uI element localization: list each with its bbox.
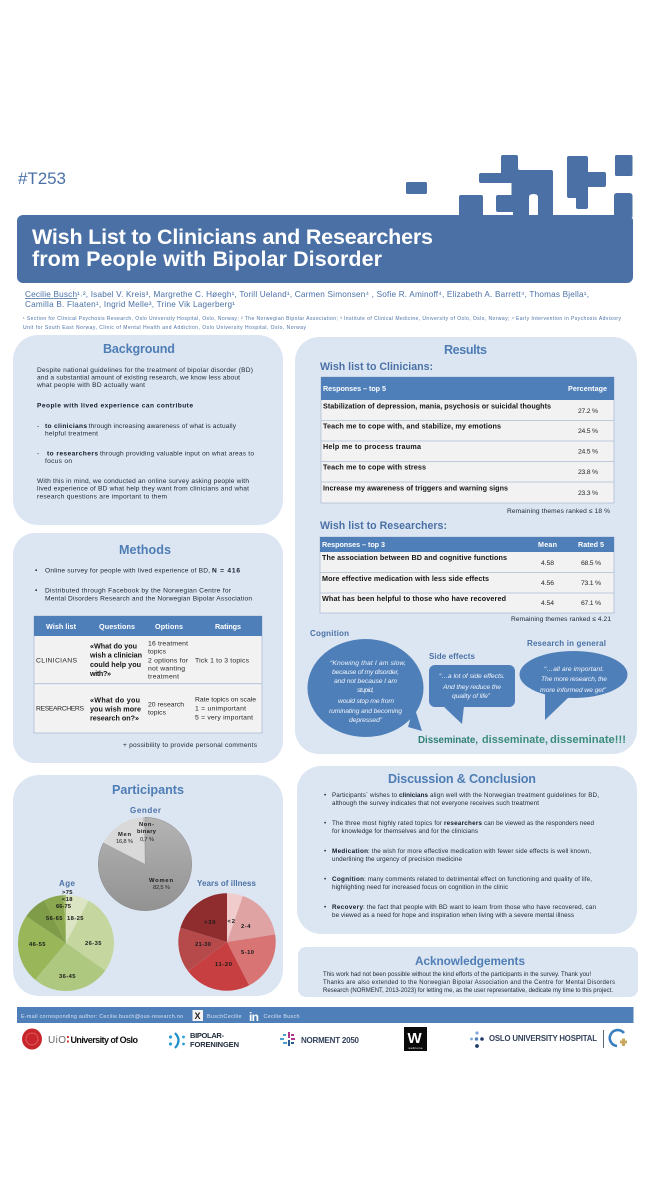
heading: acknowledgements: Acknowledgements <box>415 954 525 968</box>
logo: Wellcome <box>404 1027 427 1051</box>
affiliations: ¹ Section for Clinical Psychosis Research, Oslo University Hospital, Oslo, Norway; ² The Norwegian Bipolar Association; ³ Institute of Clinical Medicine, University of Oslo, Oslo, Norway; ⁴ Early Intervention in Psychosis Advisory <box>23 316 622 322</box>
text block: background: Despite national guidelines for the treatment of bipolar disorder (BD) <box>37 367 253 374</box>
text block: background: People with lived experience can contribute <box>37 403 193 410</box>
text block: discussion bullets: Medication <box>332 848 368 855</box>
pie chart: gender: Men <box>118 832 131 838</box>
speech bubble: cognition: would stop me from <box>338 698 394 705</box>
text block: discussion bullets: although the survey indicates that not everyone receives such treatment <box>332 800 539 807</box>
text block: discussion bullets: • <box>324 876 326 883</box>
pie chart: gender: 16,8 % <box>116 839 133 845</box>
table: survey design: «What do you <box>90 695 140 704</box>
icon: X <box>192 1010 203 1021</box>
pie chart: years of illness: 11-20 <box>215 962 232 968</box>
text block: discussion bullets: underlining the urgency of precision medicine <box>332 856 462 863</box>
panel: methods <box>13 533 283 763</box>
table: wish list to researchers: Responses – top 3 <box>322 540 385 549</box>
logo: Bipolarforeningen <box>169 1031 239 1049</box>
table: survey design: CLINICIANS <box>36 658 77 665</box>
table: survey design: could help you <box>90 660 141 669</box>
logo: Wellcome: W <box>408 1030 422 1047</box>
text block: discussion bullets: : the wish for more effective medication with fewer side effects is well known, <box>368 848 591 855</box>
pie chart: gender <box>98 817 192 911</box>
title: Wish List to Clinicians and Researchers <box>32 225 433 249</box>
text block: background <box>36 367 254 500</box>
pie chart: age: 46-55 <box>29 942 46 948</box>
title banner <box>17 215 633 283</box>
speech bubble: cognition: stupid, <box>357 687 374 694</box>
table: survey design: Ratings <box>215 622 241 631</box>
pie chart: age: 56-65 <box>46 916 63 922</box>
text block: methods bullets: Mental Disorders Research and the Norwegian Bipolar Association <box>45 596 252 603</box>
text block: discussion bullets <box>324 792 599 919</box>
text block: discussion bullets: The three most highly rated topics for <box>332 820 442 827</box>
table: survey design: Wish list <box>46 622 77 631</box>
speech bubble: cognition: and not because I am <box>334 678 397 685</box>
table: wish list to clinicians: Percentage <box>568 384 607 393</box>
table: wish list to clinicians: Responses – top 5 <box>323 384 386 393</box>
logo: Oslo University Hospital <box>470 1030 627 1048</box>
logo: Wellcome: wellcome <box>408 1046 423 1050</box>
text block: acknowledgements <box>323 972 615 994</box>
table: survey design: 5 = very important <box>195 715 253 722</box>
table: survey design: 1 = unimportant <box>195 706 246 713</box>
icon: X: X <box>194 1011 201 1021</box>
speech bubble: research in general: “…all are important. <box>544 666 604 673</box>
table: survey design: «What do you <box>90 642 137 651</box>
pie chart: years of illness: 5-10 <box>241 950 254 956</box>
text block: discussion bullets: can be viewed as the responders need <box>484 820 594 827</box>
table: survey design: wish a clinician <box>89 651 142 660</box>
logo: University of Oslo: UiO <box>48 1035 66 1046</box>
table: wish list to researchers <box>320 537 614 613</box>
heading: background: Background <box>103 342 175 356</box>
text block: background: to clinicians <box>45 423 87 430</box>
table: wish list to clinicians: Increase my awareness of triggers and warning signs <box>323 484 508 493</box>
table: wish list to clinicians: 23.8 % <box>578 469 598 476</box>
pie chart: gender: binary <box>137 829 157 835</box>
text block: background: focus on <box>45 458 72 465</box>
text block: background: - <box>37 423 39 430</box>
speech bubble: research in general: The more research, the <box>541 676 607 683</box>
subheading: clinicians: Wish list to Clinicians: <box>320 361 433 373</box>
text block: methods bullets <box>35 567 252 603</box>
text block: background: through increasing awareness of what is actually <box>88 423 237 430</box>
table: survey design: Rate topics on scale <box>195 696 256 703</box>
table: survey design: Options <box>155 622 183 631</box>
panel: discussion and conclusion <box>297 766 637 934</box>
pie chart: age <box>18 890 114 991</box>
affiliations <box>23 316 622 331</box>
table: wish list to researchers: What has been helpful to those who have recovered <box>322 594 506 603</box>
logo: University of Oslo <box>22 1028 138 1050</box>
table: survey design: topics <box>148 649 167 656</box>
text block: background: With this in mind, we conducted an online survey asking people with <box>37 478 249 485</box>
pie chart: age: 66-75 <box>56 904 72 910</box>
pie chart: gender: Non- <box>139 822 154 828</box>
callout: disseminate: disseminate!!! <box>550 734 626 746</box>
table: survey design: 2 options for <box>148 658 189 665</box>
text block: methods bullets: • <box>35 567 38 574</box>
note: remaining clinician themes: Remaining themes ranked ≤ 18 % <box>507 508 610 515</box>
text block: discussion bullets: highlighting need for increased focus on cognition in the clinic <box>332 884 508 891</box>
note: personal comments: + possibility to provide personal comments <box>123 742 258 749</box>
contact bar <box>17 1007 634 1024</box>
text block: discussion bullets: Participants´ wishes to <box>332 792 397 799</box>
label: cognition: Cognition <box>310 629 349 638</box>
text block: discussion bullets: • <box>324 904 326 911</box>
label: research in general: Research in general <box>527 639 606 648</box>
speech bubble: research in general <box>520 651 628 720</box>
text block: background: to researchers <box>47 451 98 458</box>
pie chart: age: >75 <box>62 890 73 896</box>
heading: results: Results <box>444 343 487 357</box>
table: wish list to clinicians: Teach me to cope with stress <box>323 462 426 471</box>
text block: discussion bullets: • <box>324 820 326 827</box>
table: wish list to clinicians: Teach me to cope with, and stabilize, my emotions <box>323 422 501 431</box>
speech bubble: side effects <box>429 665 515 724</box>
label: age: Age <box>59 879 76 888</box>
X handle: BuschCecilie <box>207 1014 242 1020</box>
table: wish list to researchers: More effective medication with less side effects <box>322 574 489 583</box>
text block: methods bullets: Online survey for people with lived experience of BD, <box>45 567 210 574</box>
speech bubble: side effects: quality of life” <box>452 693 491 700</box>
speech bubble: cognition: depressed” <box>349 717 383 724</box>
pie chart: years of illness: >30 <box>204 920 216 926</box>
pie chart: age: <18 <box>62 897 73 903</box>
text block: methods bullets: Distributed through Facebook by the Norwegian Centre for <box>45 588 232 595</box>
table: survey design: RESEARCHERS <box>36 706 84 713</box>
authors: Camilla B. Flaaten¹, Ingrid Melle³, Trine Vik Lagerberg¹ <box>25 300 235 309</box>
callout: disseminate <box>418 734 626 746</box>
text block: discussion bullets: be viewed as a need for hope and inspiration when living with a severe mental illness <box>332 912 574 919</box>
logo: Norment 2050: NORMENT 2050 <box>301 1036 360 1045</box>
label: side effects: Side effects <box>429 652 476 661</box>
table: wish list to clinicians: Stabilization of depression, mania, psychosis or suicidal thoughts <box>323 401 551 410</box>
speech bubble: research in general: more informed we get” <box>540 687 607 694</box>
e-mail: E-mail corresponding author: Cecilie.busch@ous-research.no <box>21 1014 183 1020</box>
authors <box>25 290 589 309</box>
table: wish list to researchers: 4.58 <box>541 560 554 567</box>
text block: background: through providing valuable input on what areas to <box>100 451 254 458</box>
speech bubble: side effects: And they reduce the <box>442 684 501 691</box>
table: wish list to researchers: Rated 5 <box>578 540 604 549</box>
text block: acknowledgements: This work had not been possible without the kind efforts of the participants in the survey. Thank you! <box>323 972 591 978</box>
heading: discussion and conclusion: Discussion & Conclusion <box>388 772 536 786</box>
table: wish list to clinicians <box>321 377 614 503</box>
text block: background: what people with BD actually want <box>36 382 145 389</box>
text block: discussion bullets: : many comments related to detrimental effect on functioning and quality of life, <box>364 876 592 883</box>
text block: background: and a substantial amount of existing research, we know less about <box>37 374 240 382</box>
speech bubble: cognition: ruminating and becoming <box>329 708 402 715</box>
pie chart: years of illness: 2-4 <box>241 924 251 930</box>
text block: discussion bullets: clinicians <box>399 792 428 799</box>
pie chart: gender: 0,7 % <box>140 837 154 843</box>
table: wish list to researchers: Mean <box>538 540 557 549</box>
table: wish list to researchers: 4.56 <box>541 580 554 587</box>
pie chart: gender: 82,5 % <box>153 885 170 891</box>
panel: results <box>295 337 637 754</box>
text block: methods bullets: N = 416 <box>212 567 240 574</box>
table: wish list to clinicians: 23.3 % <box>578 490 598 497</box>
table: wish list to clinicians: Help me to process trauma <box>323 442 422 451</box>
logo: University of Oslo: University of Oslo <box>70 1035 138 1045</box>
panel: background <box>13 335 283 525</box>
text block: discussion bullets: for knowledge for themselves and for the clinicians <box>332 828 478 835</box>
speech bubble: cognition: because of my disorder, <box>332 669 399 676</box>
heading: methods: Methods <box>119 543 171 557</box>
poster number: #T253 <box>18 169 66 188</box>
table: survey design: you wish more <box>90 705 141 714</box>
logo: Oslo University Hospital: OSLO UNIVERSITY HOSPITAL <box>489 1034 597 1043</box>
text block: discussion bullets: Cognition <box>332 876 364 883</box>
subheading: researchers: Wish list to Researchers: <box>320 520 447 532</box>
text block: background: - <box>37 451 39 458</box>
speech bubble: side effects: “…a lot of side effects. <box>439 673 505 680</box>
note: remaining researcher themes: Remaining themes ranked ≤ 4.21 <box>511 616 611 623</box>
table: survey design: treatment <box>148 673 179 680</box>
callout: disseminate: disseminate, <box>482 734 548 746</box>
title <box>32 225 433 271</box>
text block: discussion bullets: align well with the Norwegian treatment guidelines for BD, <box>430 792 599 799</box>
title: from People with Bipolar Disorder <box>32 247 383 271</box>
text block: discussion bullets: researchers <box>444 820 482 827</box>
pie chart: years of illness: 21-30 <box>195 942 211 948</box>
heading: participants: Participants <box>112 783 184 797</box>
affiliations: Unit for South East Norway, Clinic of Mental Health and Addiction, Oslo University Hospital, Oslo, Norway <box>23 325 307 331</box>
table: survey design: 20 research <box>148 702 184 709</box>
speech bubble: cognition <box>308 639 424 737</box>
label: gender: Gender <box>130 806 161 815</box>
pie chart: age: 26-35 <box>85 941 102 947</box>
text block: discussion bullets: • <box>324 848 326 855</box>
table: wish list to clinicians: 24.5 % <box>578 449 598 456</box>
authors: Cecilie Busch <box>25 290 77 299</box>
pie chart: age: 36-45 <box>59 974 76 980</box>
logo: Norment 2050 <box>280 1032 360 1046</box>
table: survey design: with?» <box>89 669 111 678</box>
table: wish list to researchers: 68.5 % <box>581 560 601 567</box>
LinkedIn name: Cecilie Busch <box>264 1014 300 1020</box>
table: wish list to researchers: The association between BD and cognitive functions <box>322 553 507 562</box>
logo: Bipolarforeningen: BIPOLAR- <box>190 1031 224 1040</box>
text block: background: research questions are important to them <box>37 493 168 500</box>
table: wish list to clinicians: 27.2 % <box>578 408 598 415</box>
authors: ¹˒², Isabel V. Kreis³, Margrethe C. Høegh¹, Torill Ueland¹, Carmen Simonsen⁴ , Sofie R. Aminoff⁴, Elizabeth A. Barrett⁴, Thomas Bjella¹, <box>77 290 589 299</box>
text block: discussion bullets: Recovery <box>332 904 363 911</box>
callout: disseminate: Disseminate, <box>418 735 478 746</box>
table: survey design <box>34 616 262 733</box>
pie chart: years of illness <box>178 893 276 991</box>
text block: discussion bullets: : the fact that people with BD want to learn from those who have recovered, can <box>363 904 596 911</box>
table: survey design: not wanting <box>148 666 185 673</box>
pie chart: age: 18-25 <box>67 916 84 922</box>
table: wish list to researchers: 67.1 % <box>581 600 601 607</box>
table: wish list to researchers: 4.54 <box>541 600 554 607</box>
pie chart: years of illness: <2 <box>228 919 235 925</box>
table: wish list to clinicians: 24.5 % <box>578 428 598 435</box>
icon: LinkedIn: in <box>249 1010 259 1024</box>
table: survey design: topics <box>148 709 167 716</box>
text block: background: helpful treatment <box>45 430 98 438</box>
table: survey design: Questions <box>99 622 135 631</box>
text block: acknowledgements: Thanks are also extended to the Norwegian Bipolar Association and the Centre for Mental Disorders <box>323 980 615 986</box>
label: years of illness: Years of illness <box>197 879 257 888</box>
speech bubble: cognition: “Knowing that I am slow, <box>330 660 406 667</box>
text block: background: lived experience of BD what help they want from clinicians and what <box>37 486 249 493</box>
text block: acknowledgements: Research (NORMENT, 2013-2023) for letting me, as the user representative, dedicate my time to this project. <box>323 988 613 994</box>
table: survey design: research on?» <box>90 713 139 722</box>
table: survey design: 16 treatment <box>148 641 188 648</box>
panel: acknowledgements <box>298 947 638 997</box>
decorative blocks above banner <box>406 155 632 217</box>
pie chart: gender: Women <box>149 878 173 884</box>
panel: participants <box>13 775 283 996</box>
text block: methods bullets: • <box>35 588 38 595</box>
table: survey design: Tick 1 to 3 topics <box>195 657 250 664</box>
table: wish list to researchers: 73.1 % <box>581 580 601 587</box>
text block: discussion bullets: • <box>324 792 326 799</box>
logo: Bipolarforeningen: FORENINGEN <box>190 1040 239 1049</box>
